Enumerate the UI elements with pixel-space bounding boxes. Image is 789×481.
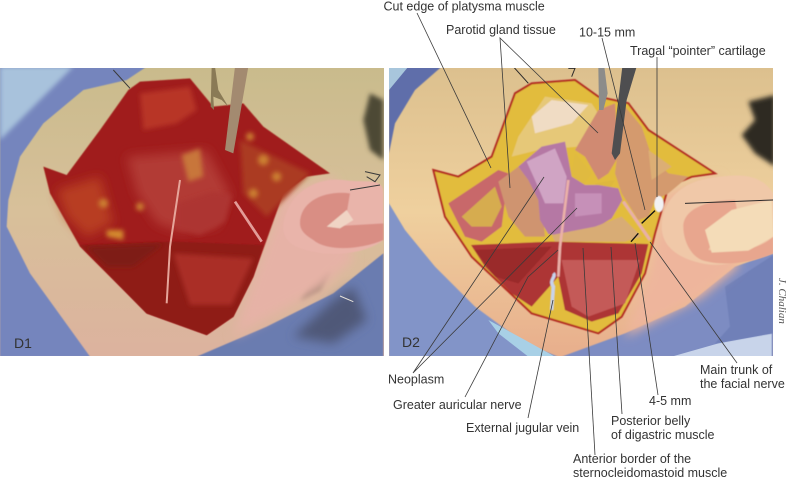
skin pink neck lower [625, 177, 738, 337]
label: 10-15 mm: 10-15 mm [579, 26, 635, 40]
ear [300, 180, 384, 252]
illustration panel D2 [389, 67, 775, 357]
leader lines [413, 13, 737, 455]
dissection field [433, 80, 715, 333]
skin pink near ear [233, 177, 353, 337]
sutures [513, 67, 773, 203]
label: tragal pointer cartilage: Tragal “pointer” cartilage [630, 44, 766, 58]
skin [389, 67, 775, 357]
sternocleidomastoid muscle [471, 242, 648, 322]
neoplasm [518, 142, 622, 237]
label: main trunk of the facial nerve: the facial nerve [700, 377, 785, 391]
label: main trunk of the facial nerve: Main trunk of [700, 363, 772, 377]
tragal pointer cartilage [654, 196, 664, 212]
light blue sheet [0, 67, 73, 140]
skin [0, 67, 390, 357]
great auricular nerve [167, 180, 180, 303]
drape lower right [197, 253, 383, 357]
artist signature: J. Chalian [776, 278, 788, 324]
photo panel D1 [0, 67, 390, 357]
label: anterior border of the sternocleidomastoid muscle: sternocleidomastoid muscle [573, 466, 727, 480]
ear [662, 175, 773, 265]
drape lower left [389, 203, 558, 357]
suture [113, 70, 380, 190]
label: posterior belly of digastric muscle: of digastric muscle [611, 428, 715, 442]
retractor [225, 67, 248, 153]
tissue under neoplasm [552, 217, 642, 242]
parotid left [448, 170, 508, 242]
great auricular nerve [558, 180, 568, 277]
arrows [631, 211, 655, 242]
neck hair [363, 93, 383, 160]
drape lower right [562, 253, 773, 357]
panel label D2: D2 [402, 334, 420, 350]
label: 4-5 mm: 4-5 mm [649, 394, 691, 408]
wound [43, 78, 330, 335]
retractor instruments [612, 67, 637, 160]
facial nerve [235, 202, 262, 242]
surgical drape upper left [0, 67, 147, 357]
hair [742, 95, 775, 167]
fat spots [99, 133, 281, 211]
label: neoplasm: Neoplasm [388, 372, 444, 386]
label: parotid gland tissue: Parotid gland tissue [446, 23, 556, 37]
upper pale tissue [512, 97, 598, 157]
label: posterior belly of digastric muscle: Posterior belly [611, 414, 690, 428]
sternocleidomastoid muscle [80, 242, 263, 335]
facial nerve [623, 202, 650, 240]
label: external jugular vein: External jugular vein [466, 421, 579, 435]
external jugular vein [552, 273, 554, 310]
platysma yellow rim [433, 80, 715, 333]
drape upper left [389, 67, 442, 153]
panel label D1: D1 [14, 335, 32, 351]
parotid right upper [575, 103, 618, 180]
label: greater auricular nerve: Greater auricular nerve [393, 398, 522, 412]
label: anterior border of the sternocleidomastoid muscle: Anterior border of the [573, 452, 691, 466]
